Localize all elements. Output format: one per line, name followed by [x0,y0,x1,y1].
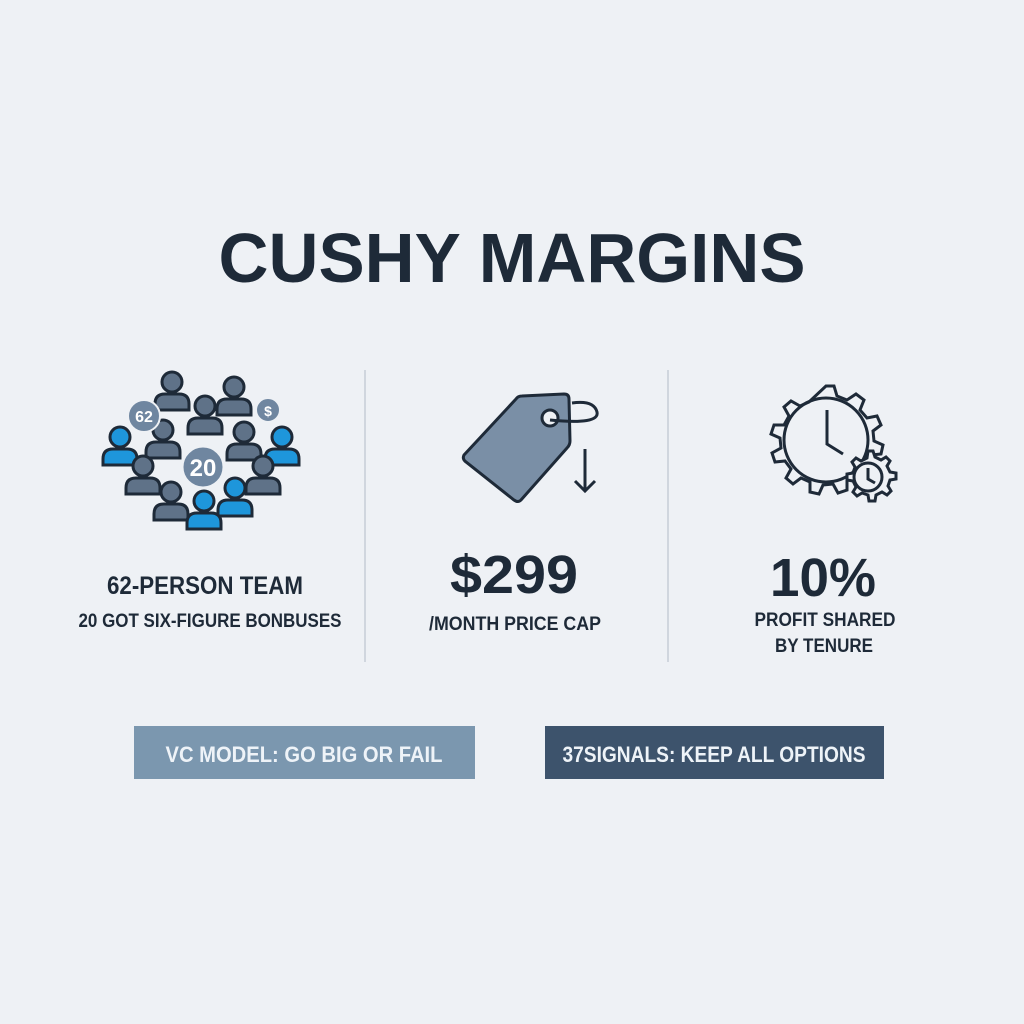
button: VC model: VC MODEL: GO BIG OR FAIL [166,742,442,767]
title: CUSHY MARGINS [218,219,806,297]
icon: team of people: $ [264,403,272,419]
text: price: $299 [450,545,578,605]
text: price: /MONTH PRICE CAP [429,614,601,635]
text: team stats: 62-PERSON TEAM [107,572,303,600]
button: 37signals [545,726,884,779]
text: profit share: PROFIT SHARED [754,610,896,631]
icon: team of people: 62 [135,409,153,426]
icon: team of people: 20 [190,455,216,482]
text: team stats [78,572,342,632]
text: profit share: BY TENURE [775,636,873,657]
button: VC model [134,726,475,779]
icon: gear clock [771,386,896,501]
text: profit share [754,548,896,657]
icon: price tag [463,394,597,502]
text: team stats: 20 GOT SIX-FIGURE BONBUSES [78,611,342,632]
button: 37signals: 37SIGNALS: KEEP ALL OPTIONS [562,742,866,767]
text: profit share: 10% [770,548,876,608]
text: price [429,545,601,635]
icon: team of people [103,372,299,529]
